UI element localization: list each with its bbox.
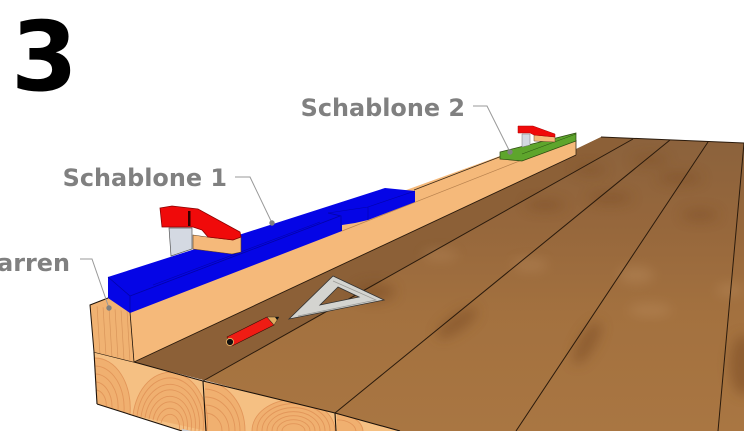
clamp block [193, 235, 241, 254]
clamp head [160, 206, 241, 240]
template 2 (green) [500, 133, 576, 161]
label: Schablone 1: Schablone 1 [63, 164, 227, 192]
batten (Sparren) [90, 140, 576, 362]
front end grain of table beams [94, 352, 400, 431]
batten top and side face [108, 140, 576, 362]
label: Schablone 2: Schablone 2 [301, 94, 465, 122]
step number: 3 [11, 1, 78, 113]
table top with wood texture [134, 137, 744, 431]
clamp bar [169, 228, 192, 256]
label: Sparren [0, 249, 112, 311]
label: Schablone 2 [301, 94, 513, 155]
clamp 2 [518, 126, 555, 147]
label: Schablone 1 [63, 164, 275, 226]
set square [289, 276, 384, 319]
batten end grain [90, 298, 134, 362]
clamp 1 [160, 206, 241, 256]
pencil [226, 317, 279, 346]
template 1 (blue) [108, 188, 415, 313]
plank joints [203, 137, 744, 431]
